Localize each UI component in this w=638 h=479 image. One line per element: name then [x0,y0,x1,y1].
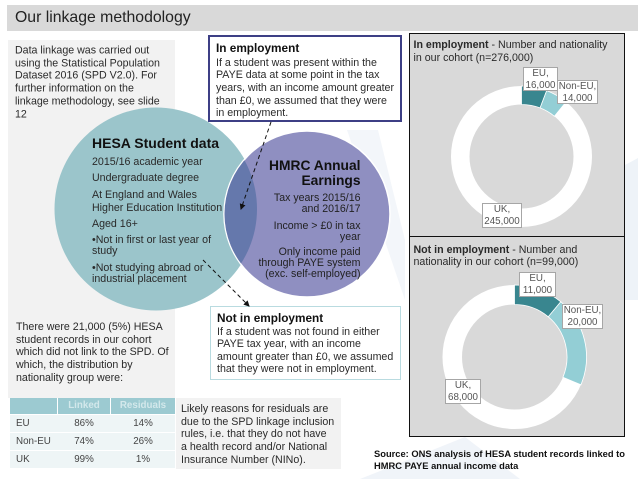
criteria list: Aged 16+ [92,218,138,230]
body: in employment: PAYE data at some point in the tax [216,69,379,81]
row: UK: UK [16,454,30,465]
body: in employment: than £0, we assumed that they were [216,95,387,107]
donut: in employment [460,86,583,218]
body: not in employment [217,326,393,375]
panel: left column background [8,40,175,398]
row: EU: EU [16,418,30,429]
label: UK 68,000: 68,000 [448,392,478,402]
label: UK 68,000: UK, [455,380,471,391]
criteria list: Undergraduate degree [92,172,199,184]
row: EU: 86% [74,418,94,429]
body: in employment [216,56,394,119]
label: UK 245,000: 245,000 [484,216,520,226]
panel: not in employment chart [409,236,625,437]
callout: in employment [208,35,402,122]
label: UK 68,000 [445,379,481,404]
text: residual records: which did not link to the SPD. Of [16,346,169,358]
panel heading: In employment - Number and nationality [414,38,607,50]
text: data linkage note: Dataset 2016 (SPD V2.0). For [15,70,157,82]
label: Non-EU 20,000: 20,000 [568,316,597,328]
label: Non-EU 14,000: 14,000 [563,92,592,104]
text: data linkage note: linkage methodology, see slide [15,95,160,107]
table header: Linked [68,400,100,411]
label: Non-EU 20,000 [562,304,603,329]
criteria list: •Not in first or last year of [92,234,211,246]
criteria text: and 2016/17 Income > £0 in tax [274,203,360,232]
row: UK: 99% [74,454,94,465]
panel heading: nationality in our cohort (n=99,000) [414,256,578,268]
text: likely reasons for residuals: Insurance Number (NINo). [181,454,306,466]
text: residual records: There were 21,000 (5%) HESA [16,321,163,333]
text: residual records: which, the distribution by [16,359,133,371]
heading: HMRC: HMRC Annual [269,158,360,173]
text: residual records: student records in our cohort [16,334,151,346]
row: EU: 14% [133,418,153,429]
table header [10,398,175,414]
body: not in employment: amount greater than £0, we assumed [217,350,393,362]
title [7,5,638,31]
body: not in employment: PAYE tax year, with an income [217,338,361,350]
row: Non-EU: 74% [74,436,94,447]
panel heading [414,244,578,268]
criteria list [92,156,222,285]
donut: not in employment [452,285,587,419]
text: HMRC annual earnings [258,158,360,280]
heading: in employment: In employment [216,40,299,54]
label: UK 245,000 [482,203,522,228]
text: likely reasons for residuals: due to the SPD linkage inclusion [181,416,334,428]
row: Non-EU: Non-EU [16,436,51,447]
label: Non-EU 20,000: Non-EU, [564,305,601,316]
label: Non-EU 14,000: Non-EU, [559,81,596,92]
circle: HMRC [224,131,390,297]
label: EU 16,000: 16,000 [526,80,555,90]
criteria list: At England and Wales [92,189,197,201]
heading: not in employment: Not in employment [217,310,323,324]
body: in employment: in employment. [216,107,288,119]
heading: HMRC: Earnings [301,173,360,188]
label: EU 11,000 [519,272,556,297]
label: EU 16,000 [523,67,558,91]
label: EU 11,000: 11,000 [523,284,552,296]
label: EU 11,000: EU, [529,273,546,284]
row: EU [10,415,175,432]
body: in employment: If a student was present within the [216,56,377,68]
arrow: to not in employment [203,260,249,306]
text: residual records: nationality group were: [16,372,123,384]
body: not in employment: that they were not in employment. [217,363,377,375]
source note [374,449,625,470]
panel heading: Not in employment - Number and [414,244,577,256]
text: HESA student data [92,135,222,285]
panel heading [414,38,608,64]
criteria list: industrial placement [92,273,187,285]
source note: HMRC PAYE annual income data [374,460,518,470]
text: likely reasons for residuals [176,398,341,469]
label: Non-EU 14,000 [557,80,598,104]
label: UK 245,000: UK, [494,204,510,215]
row: UK: 1% [136,454,150,465]
circle: HESA [54,108,258,310]
criteria text: year Only income paid [279,231,360,258]
heading: HMRC [269,158,360,188]
row: Non-EU [10,433,175,450]
venn diagram [54,108,390,310]
criteria list: •Not studying abroad or [92,262,203,274]
text: data linkage note: further information on the [15,83,134,95]
text: data linkage note: using the Statistical Population [15,57,160,69]
text: likely reasons for residuals: rules, i.e. that they do not have [181,428,327,440]
criteria text: Tax years 2015/16 [274,192,360,204]
label: EU 16,000: EU, [532,68,549,79]
title: Our linkage methodology [15,9,191,26]
panel heading: in our cohort (n=276,000) [414,52,533,64]
text: data linkage note: Data linkage was carried out [15,44,149,56]
criteria list: study [92,245,117,257]
text: data linkage note [15,44,160,120]
body: in employment: years, with an income amount greater [216,82,394,94]
criteria list: 2015/16 academic year [92,156,203,168]
source note: Source: ONS analysis of HESA student records linked to [374,449,625,459]
overlap [224,160,257,264]
arrow: to overlap [241,122,271,209]
criteria text [258,192,360,280]
body: not in employment: If a student was not found in either [217,326,380,338]
table: linked and residuals [10,398,175,469]
row: Non-EU: 26% [133,436,153,447]
callout: not in employment [210,306,401,380]
text: data linkage note: 12 [15,108,27,120]
text: likely reasons for residuals: Likely reasons for residuals are [181,403,328,415]
criteria text: through PAYE system [258,257,360,269]
criteria text: (exc. self-employed) [265,268,360,280]
criteria list: Higher Education Institution [92,202,222,214]
heading: HESA: HESA Student data [92,135,219,151]
row: UK [10,451,175,468]
text: likely reasons for residuals: a health record and/or National [181,441,327,453]
text: residual records [16,321,169,384]
table header: Residuals [120,400,166,411]
panel: in employment chart [409,33,625,237]
